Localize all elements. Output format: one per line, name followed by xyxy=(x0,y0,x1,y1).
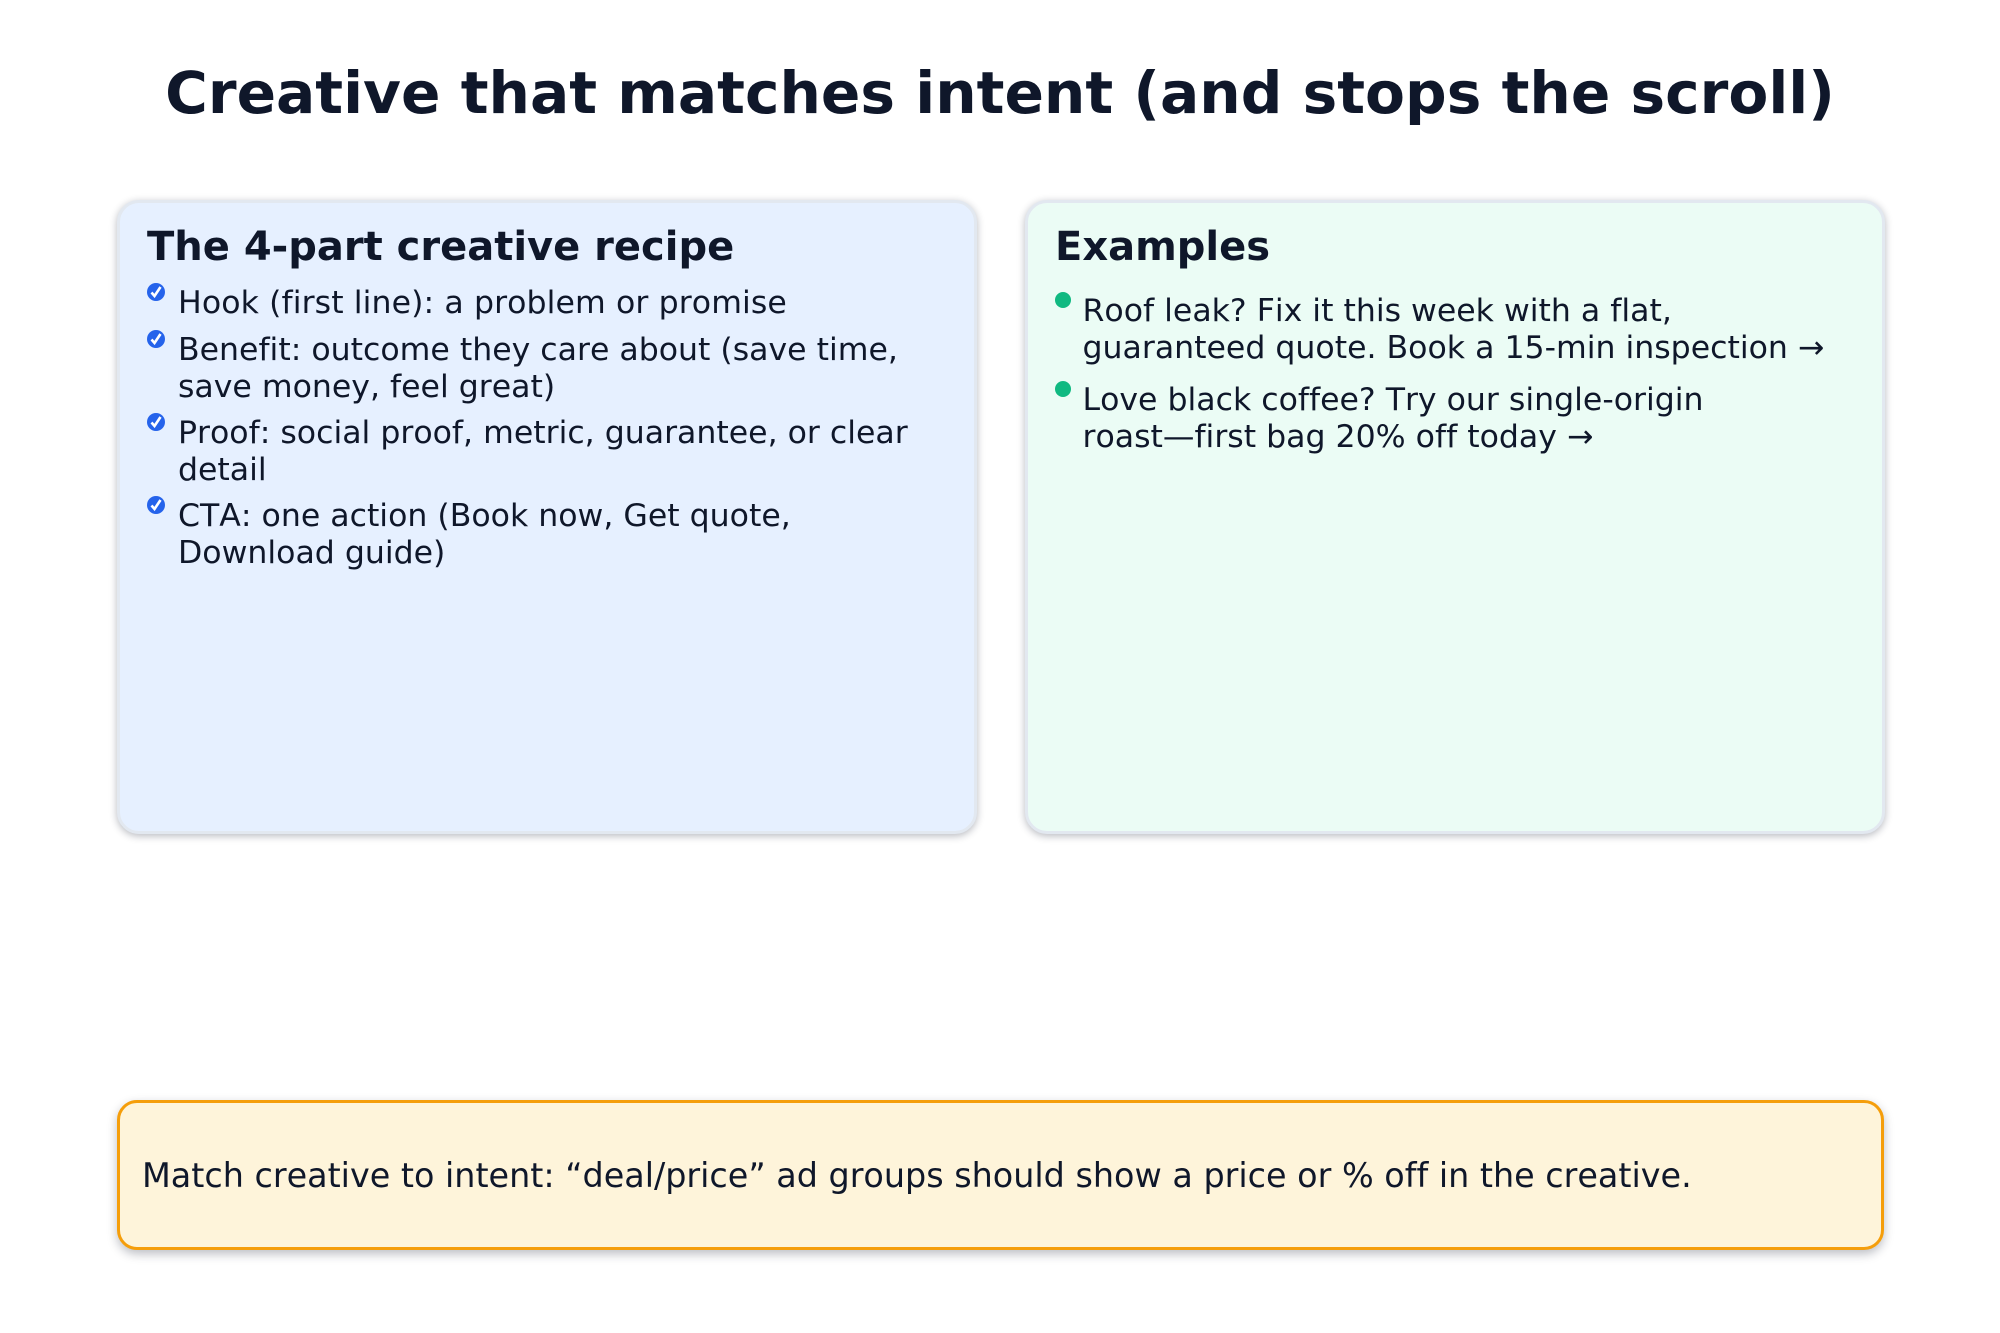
icon: check badge xyxy=(147,496,165,514)
text: proof: detail xyxy=(178,452,267,488)
text: cta xyxy=(178,498,791,571)
callout xyxy=(117,1100,1884,1250)
icon: check badge xyxy=(147,283,165,301)
text: coffee: roast—first bag 20% off today → xyxy=(1082,418,1593,454)
text: cta: Download guide) xyxy=(178,535,445,571)
icon: green bullet xyxy=(1055,292,1071,308)
callout text: Match creative to intent: “deal/price” ad groups should show a price or % off in the creative. xyxy=(142,1156,1692,1195)
list item: benefit xyxy=(147,330,898,405)
panel: examples xyxy=(1025,200,1885,834)
text: benefit: Benefit: outcome they care about (save time, xyxy=(178,332,898,368)
text: benefit xyxy=(178,332,898,405)
list item: proof xyxy=(147,413,908,488)
icon: check badge xyxy=(147,413,165,431)
text: proof: Proof: social proof, metric, guarantee, or clear xyxy=(178,415,908,451)
icon: green bullet xyxy=(1055,380,1071,396)
text: benefit: save money, feel great) xyxy=(178,369,555,405)
example: coffee xyxy=(1055,381,1704,454)
icon: check badge xyxy=(147,330,165,348)
list item: hook xyxy=(147,283,787,321)
heading: recipe: The 4-part creative recipe xyxy=(147,224,734,270)
text: cta: CTA: one action (Book now, Get quote, xyxy=(178,498,791,534)
text: coffee: Love black coffee? Try our single-origin xyxy=(1082,382,1704,418)
text: roof leak: guaranteed quote. Book a 15-min inspection → xyxy=(1082,330,1824,366)
panel: the 4-part creative recipe xyxy=(117,200,977,834)
example: roof leak xyxy=(1055,292,1824,366)
text: hook: Hook (first line): a problem or promise xyxy=(178,285,787,321)
text: coffee xyxy=(1082,382,1704,454)
text: roof leak xyxy=(1082,292,1824,366)
text: proof xyxy=(178,415,908,488)
heading: examples: Examples xyxy=(1055,224,1270,270)
text: roof leak: Roof leak? Fix it this week with a flat, xyxy=(1082,292,1672,328)
title: Creative that matches intent (and stops the scroll) xyxy=(165,59,1835,127)
list item: cta xyxy=(147,496,791,571)
